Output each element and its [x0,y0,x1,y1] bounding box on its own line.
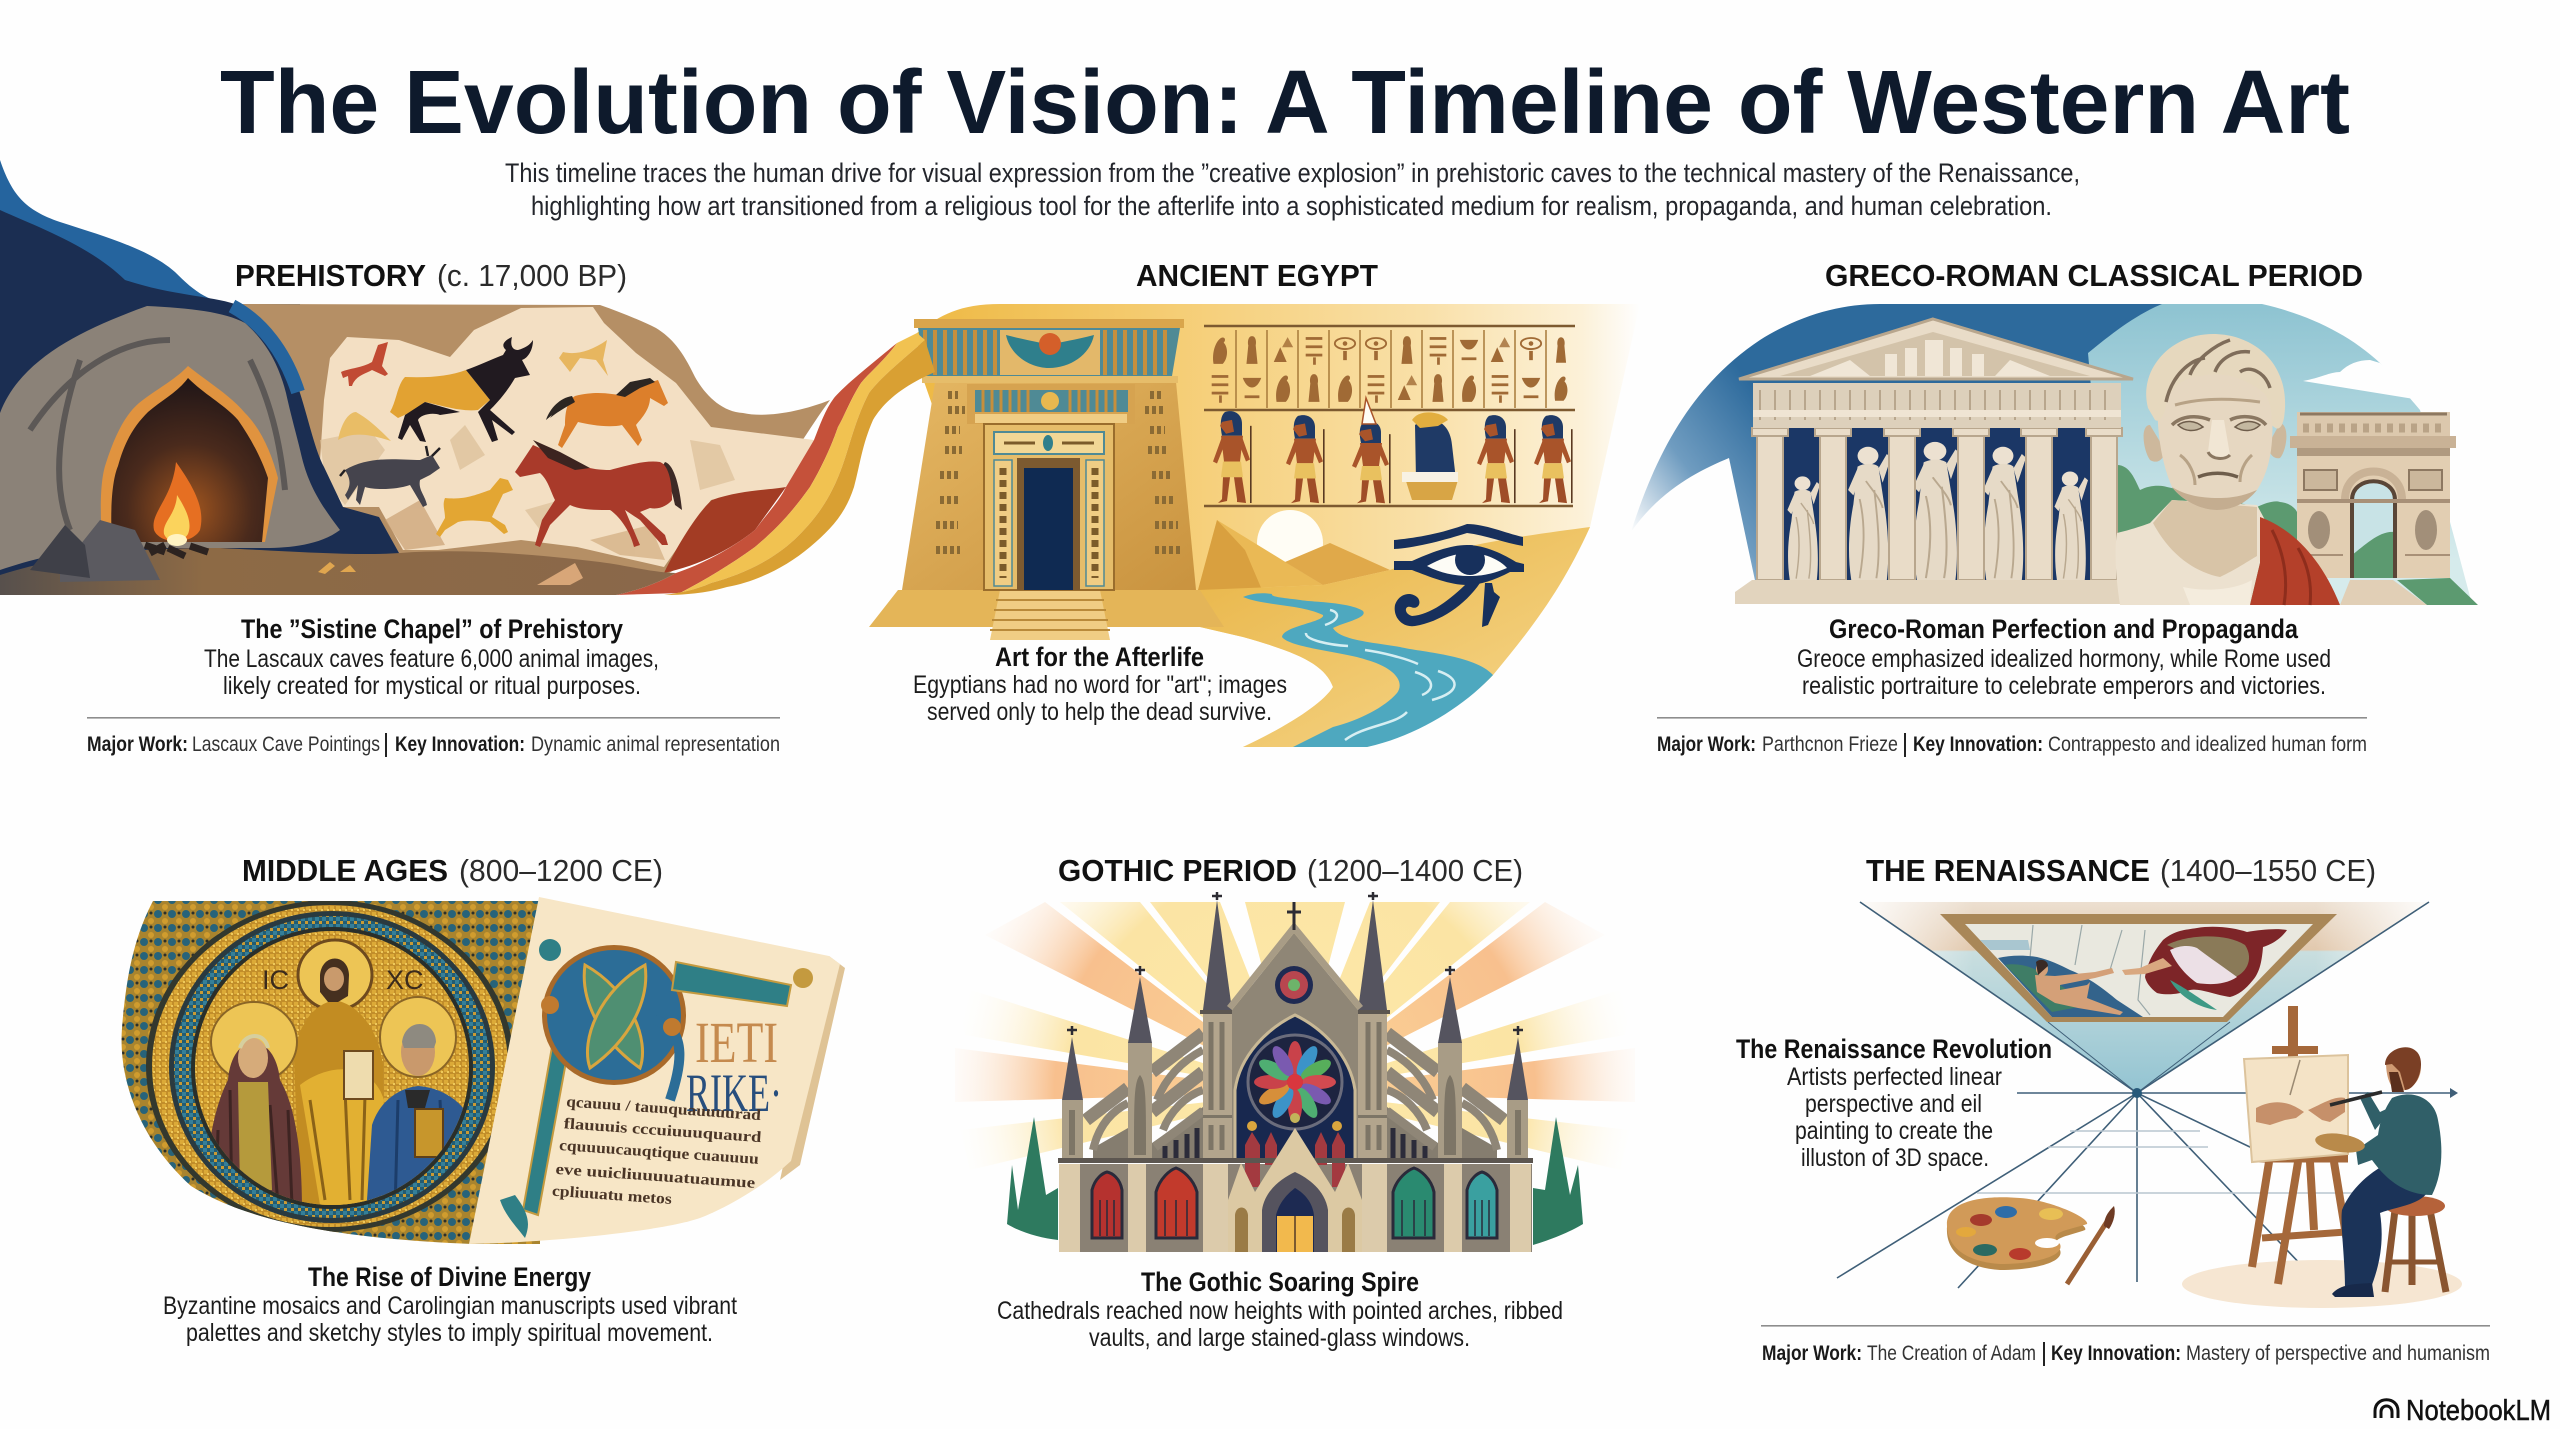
text block: gothic [997,1267,1563,1352]
stained glass windows [1092,1168,1497,1238]
painter torso [2356,1094,2441,1195]
major work: greco-roman: Key Innovation: [1913,733,2043,756]
major work: prehistory [87,733,780,757]
central gable [1232,933,1358,1160]
title: The Evolution of Vision: A Timeline of Western Art [220,53,2350,153]
icon: eye of horus [1394,524,1524,627]
small stones [318,562,583,585]
river [1243,593,1493,747]
major work: prehistory: Major Work: [87,733,188,756]
panel: ancient egypt [869,304,1640,747]
painting: grey bull [340,446,440,507]
text block: gothic: Cathedrals reached now heights with pointed arches, ribbed [997,1297,1563,1325]
temple back [1765,428,2110,580]
monogram IC: IC [262,965,289,995]
major work: renaissance: Major Work: [1762,1342,1862,1365]
painting: faint ochre animals [559,340,608,376]
string course [1058,1158,1533,1163]
dark gold ribbon [664,340,935,595]
icon: paint palette [1947,1197,2087,1270]
pediment [1739,319,2133,379]
illuminated manuscript [469,897,845,1244]
heading: prehistory: (c. 17,000 BP) [437,258,627,293]
left flank [1059,892,1235,1252]
right flank [1355,892,1531,1252]
light gold ribbon [664,333,925,595]
text block: middle ages [163,1262,737,1347]
canvas with hands [2244,1055,2348,1162]
text block: greco-roman: Greco-Roman Perfection and Propaganda [1829,614,2299,644]
major work: renaissance: The Creation of Adam [1867,1342,2036,1365]
entablature [1753,383,2121,428]
red toga [2250,517,2340,605]
cave entrance [101,366,278,542]
panel: middle ages [110,895,845,1250]
subtitle: This timeline traces the human drive for visual expression from the ”creative explosion” in prehistoric caves to the technical mastery of the Renaissance, [505,158,2080,188]
blue arc backdrop [1631,304,2180,604]
heading: middle ages: (800–1200 CE) [459,853,663,888]
cloud [2303,360,2440,420]
heading: gothic: (1200–1400 CE) [1307,853,1523,888]
bust of emperor [2116,334,2340,605]
large rose window [1248,1035,1342,1129]
brush in hand [2330,1092,2382,1105]
tunic [2116,500,2265,605]
saint figure [367,996,463,1200]
text block: greco-roman: Greoce emphasized idealized hormony, while Rome used [1797,645,2331,673]
heading: ancient egypt: ANCIENT EGYPT [1136,258,1378,293]
manuscript pages [780,956,845,1180]
egypt backdrop [917,304,1640,747]
text block: greco-roman: realistic portraiture to celebrate emperors and victories. [1802,672,2326,700]
cave ground [0,548,676,595]
panel: prehistory [0,160,935,595]
heading: renaissance [1866,853,2376,888]
desert dunes [1198,527,1590,747]
trees [1007,1117,1583,1245]
stool [2385,1196,2446,1292]
major work: renaissance: Mastery of perspective and humanism [2186,1342,2490,1365]
painter legs [2342,1160,2432,1290]
monogram XC: XC [386,965,424,995]
sun [1257,510,1323,576]
byzantine mosaic [110,895,550,1250]
text block: middle ages: The Rise of Divine Energy [308,1262,591,1292]
major work: prehistory: Lascaux Cave Pointings [192,733,380,756]
triumphal arch [2290,412,2456,578]
major work: greco-roman: Parthcnon Frieze [1762,733,1898,756]
cave paintings [338,337,682,547]
seated figure [1402,412,1458,500]
wall texture patches [320,425,735,560]
adam figure [2035,962,2123,1015]
ceiling frame [1940,914,2337,1022]
chest shading [2153,500,2257,577]
text block: renaissance [1736,1034,2052,1172]
text block: renaissance: illuston of 3D space. [1801,1144,1989,1172]
text block: egypt [913,642,1287,726]
panel: greco-roman [1631,304,2478,605]
painting: small ochre animal [436,478,513,537]
painting: small red animal [341,342,388,386]
painting: ochre and black bull [390,337,533,442]
manuscript large letters second row: RIKE· [686,1063,782,1123]
window arch [1235,1015,1355,1160]
icon: campfire [30,462,208,582]
major work: greco-roman: Contrappesto and idealized human form [2048,733,2367,756]
text block: renaissance: painting to create the [1795,1117,1993,1145]
text block: renaissance: The Renaissance Revolution [1736,1034,2052,1064]
manuscript large letters: IETI [695,1010,778,1075]
manuscript text lines: flauuuis cccuiuuuquaurd [563,1115,762,1146]
sky [2088,304,2472,604]
text block: gothic: The Gothic Soaring Spire [1141,1267,1419,1297]
egyptian figures [1213,398,1573,503]
vanishing point [2132,1088,2142,1098]
heading: gothic [1058,853,1523,888]
perspective cone [1860,902,2429,1093]
heading: greco-roman: GRECO-ROMAN CLASSICAL PERIOD [1825,258,2363,293]
christ figure [294,940,385,1205]
portal [1228,1128,1362,1252]
navy cave mass [0,210,399,595]
heading: renaissance: (1400–1550 CE) [2160,853,2376,888]
lower wall [1059,1164,1532,1252]
major work: prehistory: Key Innovation: [395,733,525,756]
manuscript text lines: qcauuu / tauuquauuuurad [566,1093,762,1124]
winged sun disc [1006,333,1094,368]
major work: greco-roman [1657,733,2367,757]
icon: paintbrush [2067,1206,2115,1284]
head [2158,370,2272,510]
hills [2110,465,2300,604]
painter palette [2314,1131,2366,1155]
god arm [2122,958,2172,975]
creation of adam fresco [1965,924,2313,1017]
subtitle [505,158,2080,221]
panel: renaissance [1837,902,2462,1308]
perspective lines [1837,902,2450,1288]
text block: prehistory: The Lascaux caves feature 6,000 animal images, [204,645,659,673]
cave rock [0,306,340,570]
text block: middle ages: palettes and sketchy styles to imply spiritual movement. [186,1319,713,1347]
text block: greco-roman [1797,614,2331,700]
major work: greco-roman: Major Work: [1657,733,1756,756]
ears [2144,423,2286,462]
heading: prehistory: PREHISTORY [235,258,426,293]
red ribbon [616,343,897,595]
cave exterior blue [0,160,404,595]
heading: prehistory [235,258,627,293]
text block: prehistory [204,614,659,700]
painting: orange horse [546,378,668,448]
subtitle: highlighting how art transitioned from a religious tool for the afterlife into a sophisticated medium for realism, propaganda, and human celebration. [531,191,2052,221]
temple pylon [869,319,1224,640]
text block: egypt: Egyptians had no word for "art"; images [913,671,1287,699]
face features [2172,417,2266,425]
red rock [664,487,786,573]
god robe [2170,946,2237,984]
light rays [955,902,1635,1170]
columns [1752,428,2122,580]
manuscript text lines [551,1093,764,1214]
statues [1787,442,2088,580]
lancet windows [1245,1121,1345,1187]
text block: prehistory: likely created for mystical or ritual purposes. [223,672,641,700]
god teal drape [2170,980,2217,1010]
mary figure [205,1002,302,1210]
illuminated initial [500,939,813,1238]
hieroglyph panel [1204,326,1575,506]
painter head [2386,1051,2421,1091]
manuscript text lines: eve uuicliuuuuatuaumue [555,1161,756,1192]
painter [2314,1047,2446,1297]
manuscript text lines: cquuuucauqtique cuauuuu [559,1137,760,1168]
cream painted wall [320,307,814,567]
stylobate [1735,580,2140,604]
painting: large red horse [515,440,682,547]
major work: prehistory: Dynamic animal representation [531,733,780,756]
panel: gothic cathedral [955,892,1635,1252]
heading: middle ages: MIDDLE AGES [242,853,448,888]
ground shadow [2182,1260,2462,1308]
hair [2146,334,2285,429]
small rose window [1275,966,1313,1004]
text block: egypt: Art for the Afterlife [995,642,1204,672]
text block: egypt: served only to help the dead survive. [927,698,1272,726]
text block: middle ages: Byzantine mosaics and Carolingian manuscripts used vibrant [163,1292,737,1320]
heading: renaissance: THE RENAISSANCE [1866,853,2150,888]
major work: renaissance [1762,1342,2490,1366]
god cloak [2145,927,2287,997]
heading: middle ages [242,853,663,888]
text block: gothic: vaults, and large stained-glass windows. [1089,1324,1470,1352]
manuscript text lines: cpliuuatu metos [551,1183,672,1208]
text block: renaissance: perspective and eil [1805,1090,1982,1118]
major work: renaissance: Key Innovation: [2051,1342,2181,1365]
text block: renaissance: Artists perfected linear [1787,1063,2002,1091]
ground and road [2340,580,2427,605]
arrow [2450,1088,2458,1098]
pyramids [1198,520,1390,590]
text block: prehistory: The ”Sistine Chapel” of Prehistory [241,614,623,644]
heading: gothic: GOTHIC PERIOD [1058,853,1297,888]
rock wall band [240,304,830,595]
easel [2252,1006,2353,1284]
